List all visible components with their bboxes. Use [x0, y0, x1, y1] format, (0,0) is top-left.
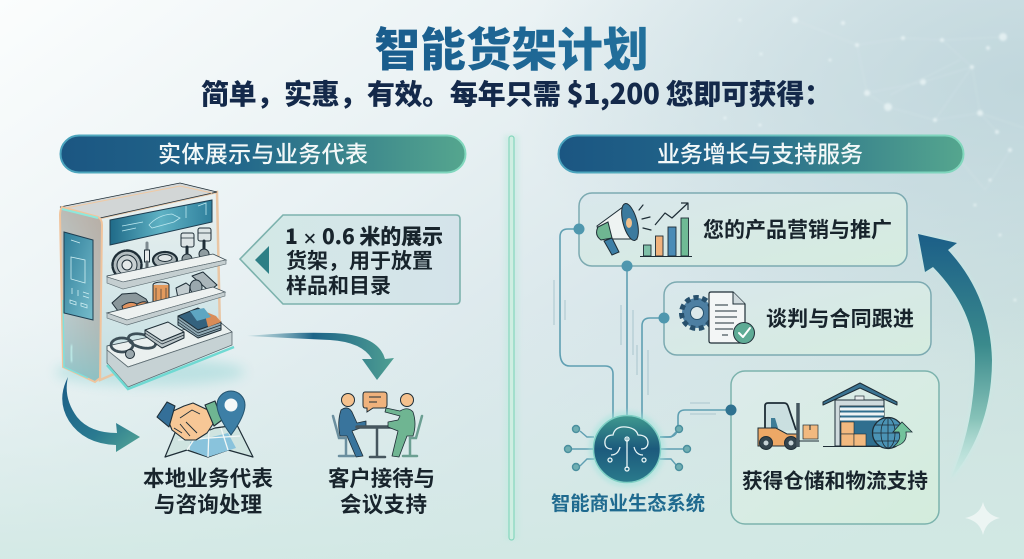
ecosystem hub: [564, 411, 690, 487]
label: local sales rep: 与咨询处理: [154, 488, 262, 519]
service card: warehousing and logistics: 获得仓储和物流支持: [742, 464, 928, 494]
connector nodes: [574, 224, 736, 416]
icon: client meeting: [333, 392, 422, 457]
arrow: shelf to sales rep: [62, 377, 140, 452]
icon: gear and contract: [682, 292, 754, 344]
shelf back and frame: [100, 192, 220, 380]
connector lines: [554, 229, 731, 437]
shelf 3 base: [107, 322, 232, 367]
right person: [400, 394, 414, 406]
icon: display shelf: [55, 183, 245, 389]
service card: negotiation: 谈判与合同跟进: [766, 303, 914, 333]
callout: display shelf size: 样品和目录: [286, 270, 391, 300]
callout: display shelf size: [240, 215, 460, 304]
handshake: [168, 403, 213, 440]
map: [165, 425, 253, 457]
icon: forklift: [758, 403, 819, 450]
map pin: [217, 391, 245, 435]
label: client meeting support: 会议支持: [340, 488, 427, 519]
icon: cloud circuit: [605, 427, 648, 471]
label: client meeting support: 客户接待与: [328, 462, 435, 493]
icon: handshake and map: [157, 391, 253, 457]
service card: marketing: [579, 193, 907, 266]
hub circuit branches: [564, 426, 690, 470]
label: local sales rep: 本地业务代表: [143, 462, 273, 493]
center divider: [504, 135, 519, 540]
icon: sparkle: [965, 502, 1000, 535]
service card: warehousing and logistics: [731, 371, 939, 524]
heading: physical display: [60, 135, 466, 172]
table: [357, 425, 398, 429]
shelf 2: [107, 287, 225, 320]
shelf 3 parts: belts and catalogues: [111, 308, 221, 358]
subtitle: 简单，实惠，有效。每年只需 $1,200 您即可获得：: [201, 73, 832, 113]
speech bubble: [363, 392, 387, 412]
icon: warehouse: [823, 383, 897, 446]
left person: [342, 394, 354, 406]
label: client meeting support: [328, 462, 435, 519]
icon: megaphone: [597, 202, 651, 255]
heading: physical display: 实体展示与业务代表: [158, 135, 368, 169]
service card: marketing: 您的产品营销与推广: [703, 214, 892, 244]
heading: growth and support: [558, 135, 964, 172]
service card: negotiation: [664, 282, 931, 355]
label: local sales rep: [143, 462, 273, 519]
panel: physical display and sales rep: [55, 135, 466, 519]
panel: growth and support services: [551, 135, 992, 524]
heading: growth and support: 业务增长与支持服务: [657, 135, 863, 169]
shelf 2 parts: [112, 272, 217, 317]
arrow: growth cycle: [918, 234, 992, 480]
icon: growth bars: [640, 203, 692, 256]
callout: display shelf size: 货架，用于放置: [286, 245, 433, 275]
shelf 1: [107, 254, 226, 282]
label: ecosystem: 智能商业生态系统: [551, 488, 705, 516]
arrow: shelf to meeting support: [247, 333, 394, 380]
callout: display shelf size: 1 × 0.6 米的展示: [285, 221, 443, 251]
title: 智能货架计划: [374, 14, 648, 80]
header screen: [110, 200, 212, 245]
icon: globe: [872, 418, 912, 448]
shelf 1 parts: [112, 228, 211, 280]
side screen: [64, 232, 93, 320]
